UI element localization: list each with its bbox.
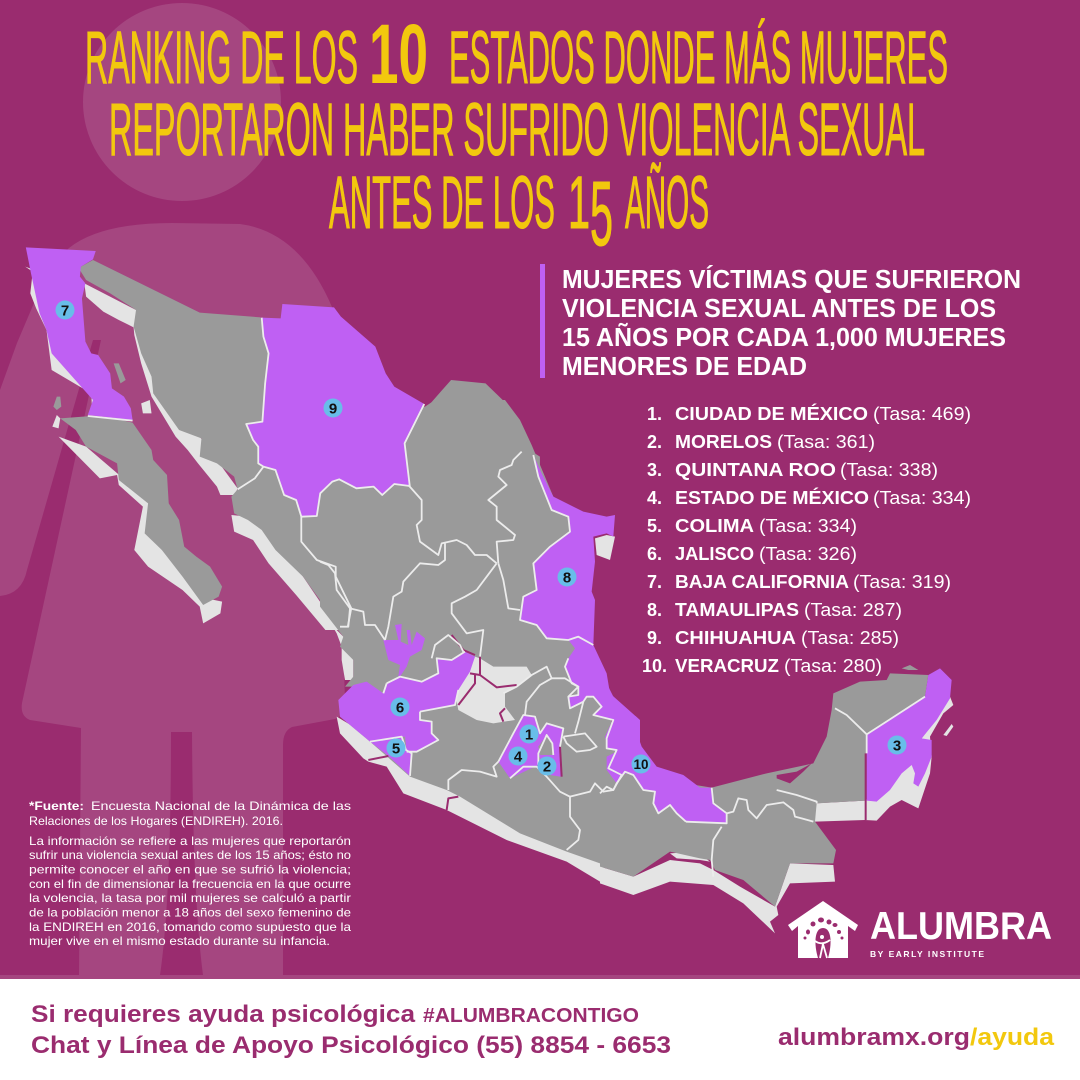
marker 8: [558, 568, 576, 586]
ranking list: 2.: [647, 432, 662, 452]
heading accent bar: [540, 264, 545, 378]
ranking list: (Tasa: 326): [759, 544, 857, 564]
marker 3: [888, 736, 906, 754]
source note: La información se refiere a las mujeres que reportarón: [29, 834, 351, 848]
ranking list: JALISCO: [675, 544, 754, 564]
source note: permite conocer el año en que se sufrió la violencia;: [29, 862, 351, 876]
marker 1: 1: [525, 726, 533, 744]
state 8: Tamaulipas: [520, 455, 615, 645]
marker 2: 2: [543, 758, 551, 776]
dark state borders: [368, 635, 866, 820]
logo: Alumbra: [788, 901, 1052, 959]
website: /ayuda: [970, 1024, 1055, 1051]
ranking list: MORELOS: [675, 432, 772, 452]
ranking list: TAMAULIPAS: [675, 600, 799, 620]
source note: la volencia, la tasa por mil mujeres se calculó a partir: [29, 891, 351, 905]
ranking list: 10.: [642, 656, 667, 676]
state 10: Veracruz: [565, 637, 727, 823]
title: [85, 7, 948, 265]
ranking list: (Tasa: 334): [873, 488, 971, 508]
ranking list: CIUDAD DE MÉXICO: [675, 403, 868, 424]
white state borders: [88, 318, 925, 877]
source note: Relaciones de los Hogares (ENDIREH). 2016.: [29, 814, 283, 828]
source note: la ENDIREH en 2016, tomando como supuesto que la: [29, 920, 351, 934]
ranking list: QUINTANA ROO: [675, 460, 836, 480]
title: 1: [568, 161, 590, 244]
ranking list: 3.: [647, 460, 662, 480]
website: alumbramx.org: [778, 1024, 970, 1051]
title: 5: [590, 163, 613, 265]
source note: Encuesta Nacional de la Dinámica de las: [91, 799, 351, 813]
marker 10: [632, 754, 650, 774]
marker 10: 10: [634, 757, 648, 772]
ranking list: ESTADO DE MÉXICO: [675, 487, 869, 508]
ranking list: VERACRUZ: [675, 656, 779, 676]
website: [778, 1024, 1055, 1051]
source note: con el fin de dimensionar la frecuencia en la que ocurre: [29, 877, 351, 891]
help line: [31, 1001, 671, 1059]
ranking list: (Tasa: 361): [777, 432, 875, 452]
state 5: Colima: [370, 737, 412, 776]
ranking list: (Tasa: 287): [804, 600, 902, 620]
state 7: Baja California: [26, 247, 133, 420]
marker 4: 4: [514, 748, 523, 766]
state 9: Chihuahua: [246, 304, 424, 517]
ranking list: 4.: [647, 488, 662, 508]
state 2: Morelos: [538, 735, 561, 777]
ranking list: CHIHUAHUA: [675, 628, 796, 648]
source note: [29, 799, 351, 948]
ranking list: (Tasa: 319): [853, 572, 951, 592]
ranking list: (Tasa: 338): [840, 460, 938, 480]
ranking list: 8.: [647, 600, 662, 620]
subheading: MUJERES VÍCTIMAS QUE SUFRIERON: [562, 265, 1021, 294]
help line: Si requieres ayuda psicológica: [31, 1001, 416, 1028]
ranking list: 7.: [647, 572, 662, 592]
marker 6: 6: [396, 700, 404, 716]
marker 9: [324, 398, 342, 418]
ranking list: COLIMA: [675, 516, 754, 536]
source note: sufrir una violencia sexual antes de los 15 años; ésto no: [29, 848, 351, 862]
lagoon of Términos: [777, 763, 812, 783]
source note: mujer vive en el mismo estado durante su infancia.: [29, 934, 330, 948]
coastal shadow: [25, 267, 953, 933]
marker 4: [508, 746, 528, 766]
wordmark: ALUMBRA: [870, 905, 1052, 948]
ranking list: BAJA CALIFORNIA: [675, 572, 849, 592]
gray states: [53, 260, 928, 907]
title: 10: [369, 7, 428, 101]
help line: Chat y Línea de Apoyo Psicológico (55) 8854 - 6653: [31, 1032, 671, 1059]
ranking list: 1.: [647, 404, 662, 424]
state 6: Jalisco: [338, 624, 475, 752]
subheading: [562, 265, 1021, 381]
state 3: Quintana Roo: [867, 668, 952, 802]
marker 8: 8: [563, 570, 571, 586]
marker 5: 5: [392, 740, 400, 758]
ranking list: [642, 403, 971, 676]
ranking list: (Tasa: 280): [784, 656, 882, 676]
marker 2: [538, 756, 556, 776]
source note: de la población menor a 18 años del sexo femenino de: [29, 906, 351, 920]
ranking list: (Tasa: 334): [759, 516, 857, 536]
subheading: MENORES DE EDAD: [562, 353, 807, 381]
ranking list: 6.: [647, 544, 662, 564]
marker 7: [56, 300, 74, 320]
marker 5: [386, 738, 406, 758]
ranking markers on the map: [56, 300, 906, 776]
marker 6: [390, 698, 410, 716]
marker 9: 9: [329, 400, 337, 418]
icon: house with child: [788, 901, 858, 958]
subheading: VIOLENCIA SEXUAL ANTES DE LOS: [562, 295, 996, 323]
white central region: [455, 657, 532, 723]
marker 7: 7: [61, 302, 69, 320]
tagline: BY EARLY INSTITUTE: [870, 949, 984, 959]
marker 1: [520, 724, 538, 744]
source note: *Fuente:: [29, 799, 84, 813]
states 1 and 4: Ciudad de México and Estado de México: [498, 715, 563, 778]
footer band: [0, 979, 1080, 1080]
title: ANTES DE LOS: [329, 161, 555, 244]
title: AÑOS: [625, 161, 709, 244]
ranking list: (Tasa: 469): [873, 404, 971, 424]
marker 3: 3: [893, 738, 901, 754]
title: RANKING DE LOS: [85, 16, 358, 99]
subheading: 15 AÑOS POR CADA 1,000 MUJERES: [562, 322, 1006, 352]
map of Mexico: [25, 247, 953, 933]
ranking list: 5.: [647, 516, 662, 536]
help line: #ALUMBRACONTIGO: [423, 1005, 639, 1027]
ranking list: 9.: [647, 628, 662, 648]
ranking list: (Tasa: 285): [801, 628, 899, 648]
